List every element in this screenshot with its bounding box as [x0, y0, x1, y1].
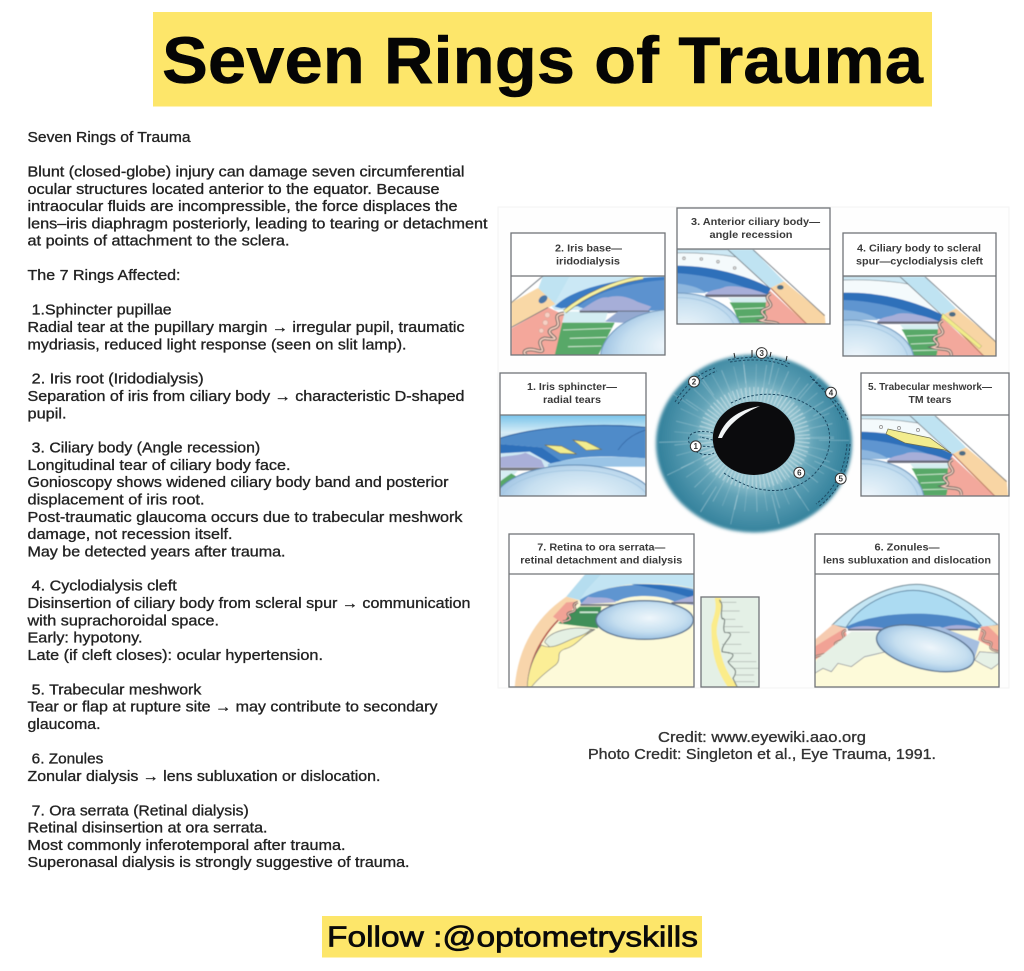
dashed ring tracings	[675, 357, 850, 507]
ring 4 text: 4. Cyclodialysis cleft	[32, 579, 177, 595]
inset: retinal dialysis at the ora serrata	[701, 597, 759, 687]
ring 3 text: Gonioscopy shows widened ciliary body band and posterior	[28, 475, 449, 491]
ring 3 text	[28, 441, 463, 560]
ring 3 text: May be detected years after trauma.	[28, 544, 286, 560]
ring 6 text	[28, 752, 380, 785]
panel 5 label: TM tears	[908, 395, 952, 406]
follow banner	[322, 916, 702, 958]
ring 1 text: mydriasis, reduced light response (seen on slit lamp).	[28, 337, 406, 353]
number markers: 3	[759, 349, 764, 358]
panel 4 label: spur—cyclodialysis cleft	[856, 257, 984, 268]
ring 2 text: pupil.	[28, 406, 66, 422]
ring 1 text: 1.Sphincter pupillae	[32, 303, 172, 319]
panel 7 label	[520, 542, 683, 566]
panel 7: retina to ora serrata retinal detachment and dialysis	[509, 534, 694, 687]
number markers	[689, 348, 846, 484]
panel 5 label: 5. Trabecular meshwork—	[868, 382, 993, 393]
text heading: Seven Rings of Trauma	[28, 130, 191, 146]
panel 1: iris sphincter radial tears	[499, 372, 647, 497]
panel 3: anterior ciliary body angle recession	[676, 207, 831, 325]
eyeball iris disc	[656, 354, 852, 532]
panel 4 label: 4. Ciliary body to scleral	[857, 244, 981, 255]
pupil	[713, 402, 795, 475]
panel 6 label: 6. Zonules—	[874, 542, 940, 553]
ring 5 text	[28, 682, 438, 733]
number markers: 4	[829, 388, 834, 398]
panel 4: ciliary body to scleral spur cyclodialysis cleft	[842, 232, 997, 357]
ring 3 text: displacement of iris root.	[28, 492, 204, 508]
credit lines: Photo Credit: Singleton et al., Eye Trauma, 1991.	[588, 747, 936, 763]
ring 7 text: Retinal disinsertion at ora serrata.	[28, 821, 268, 837]
ring 6 text: Zonular dialysis → lens subluxation or dislocation.	[28, 769, 380, 785]
ring 4 text	[26, 579, 470, 664]
ring 7 text	[28, 803, 410, 871]
panel 2 label: 2. Iris base—	[555, 244, 623, 255]
ring 4 text: Late (if cleft closes): ocular hypertension.	[28, 648, 323, 664]
panel 2 label	[555, 244, 623, 268]
title banner: Seven Rings of Trauma	[162, 23, 924, 97]
panel 3 label	[691, 217, 821, 241]
ring 1 text: Radial tear at the pupillary margin → irregular pupil, traumatic	[28, 320, 464, 336]
intro paragraph	[28, 164, 488, 250]
ring 3 text: damage, not recession itself.	[28, 527, 232, 543]
text column: explanation of the seven rings	[26, 130, 487, 871]
credit lines	[588, 730, 936, 763]
ring 5 text: 5. Trabecular meshwork	[32, 682, 202, 698]
top suture ticks	[734, 350, 787, 361]
intro paragraph: lens–iris diaphragm posteriorly, leading to tearing or detachment	[28, 216, 488, 232]
panel 6 label: lens subluxation and dislocation	[823, 555, 991, 566]
ring 7 text: Superonasal dialysis is strongly suggestive of trauma.	[28, 855, 410, 871]
follow banner: Follow :@optometryskills	[327, 922, 698, 954]
ring 1 text	[28, 303, 464, 353]
ring 3 text: Longitudinal tear of ciliary body face.	[28, 458, 290, 474]
ring 5 text: Tear or flap at rupture site → may contribute to secondary	[28, 700, 438, 716]
number markers: 5	[838, 474, 843, 484]
panel 1 label	[527, 382, 618, 406]
intro paragraph: intraocular fluids are incompressible, the force displaces the	[28, 199, 458, 215]
central eye: iris with numbered ring positions	[656, 348, 852, 532]
panel 2 label: iridodialysis	[556, 257, 620, 268]
panel 2: iris base iridodialysis	[510, 232, 666, 356]
panel 5: trabecular meshwork TM tears	[860, 372, 1010, 497]
panel 3 label: 3. Anterior ciliary body—	[691, 217, 821, 228]
panel 5 label	[868, 382, 993, 406]
ring 2 text: 2. Iris root (Iridodialysis)	[32, 372, 204, 388]
panel 7 label: retinal detachment and dialysis	[520, 555, 683, 566]
ring 7 text: Most commonly inferotemporal after trauma.	[28, 838, 346, 854]
list heading: The 7 Rings Affected:	[28, 268, 180, 284]
ring 3 text: Post-traumatic glaucoma occurs due to trabecular meshwork	[28, 510, 463, 526]
intro paragraph: at points of attachment to the sclera.	[28, 234, 290, 250]
ring 3 text: 3. Ciliary body (Angle recession)	[32, 441, 260, 457]
ring 4 text: with suprachoroidal space.	[26, 613, 219, 629]
pupil highlight	[718, 406, 760, 438]
ring 6 text: 6. Zonules	[32, 752, 103, 768]
panel 1 label: 1. Iris sphincter—	[527, 382, 618, 393]
panel 1 label: radial tears	[543, 395, 601, 406]
number markers: 1	[693, 442, 698, 451]
ring 5 text: glaucoma.	[28, 717, 100, 733]
number markers: 2	[692, 378, 697, 386]
ring 2 text: Separation of iris from ciliary body → characteristic D-shaped	[28, 389, 464, 405]
intro paragraph: Blunt (closed-globe) injury can damage seven circumferential	[28, 164, 464, 180]
ring 2 text	[28, 372, 464, 422]
panel 6 label	[823, 542, 991, 566]
intro paragraph: ocular structures located anterior to the equator. Because	[28, 182, 440, 198]
panel 6: zonules lens subluxation and dislocation	[815, 534, 999, 687]
ring 7 text: 7. Ora serrata (Retinal dialysis)	[32, 803, 249, 819]
ring 4 text: Early: hypotony.	[28, 631, 142, 647]
panel 4 label	[856, 244, 984, 268]
panel 7 label: 7. Retina to ora serrata—	[537, 542, 666, 553]
credit lines: Credit: www.eyewiki.aao.org	[658, 730, 866, 746]
number markers: 6	[797, 468, 802, 478]
panel 3 label: angle recession	[710, 230, 792, 241]
diagram: seven rings of the eye	[493, 207, 1009, 688]
ring 4 text: Disinsertion of ciliary body from scleral spur → communication	[28, 596, 470, 612]
